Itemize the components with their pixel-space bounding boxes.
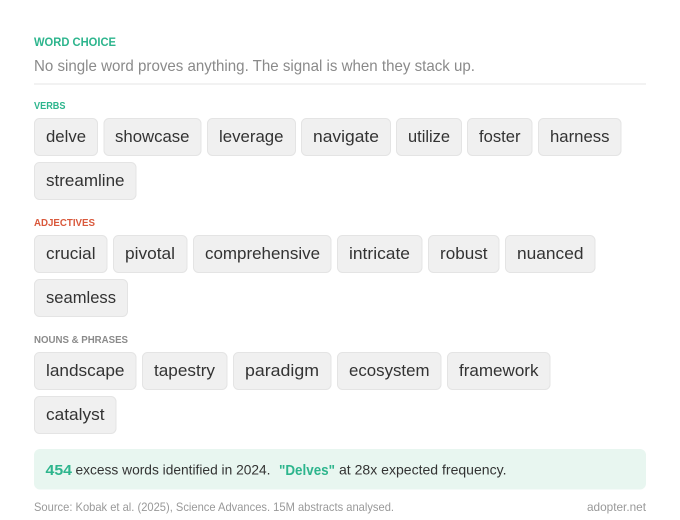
section: adjectives xyxy=(34,217,595,316)
source note: Source: Kobak et al. (2025), Science Advances. 15M abstracts analysed. xyxy=(34,500,394,514)
chip: paradigm xyxy=(234,352,331,390)
chip: showcase xyxy=(104,118,201,156)
chip: foster: foster xyxy=(479,127,521,146)
chip: nuanced xyxy=(506,236,595,272)
chip: harness xyxy=(538,118,621,156)
chip: foster xyxy=(468,118,532,156)
callout highlight: Delves: "Delves" xyxy=(279,462,335,479)
chip: comprehensive: comprehensive xyxy=(205,244,320,263)
chip: navigate: navigate xyxy=(313,127,379,146)
callout text: frequency: at 28x expected frequency. xyxy=(339,462,506,478)
subtitle: No single word proves anything. The signal is when they stack up. xyxy=(34,58,475,75)
chip: landscape xyxy=(34,352,136,390)
callout xyxy=(34,449,646,490)
chip: landscape: landscape xyxy=(46,361,124,380)
chip: leverage xyxy=(208,118,296,156)
chip: delve: delve xyxy=(46,127,86,146)
chip: leverage: leverage xyxy=(219,127,284,146)
section: nouns and phrases xyxy=(34,334,550,434)
chip: comprehensive xyxy=(194,236,331,272)
chip: streamline: streamline xyxy=(46,171,124,190)
chip: streamline xyxy=(34,162,136,200)
chip: delve xyxy=(34,118,98,156)
chip: seamless: seamless xyxy=(46,288,116,307)
chip: crucial xyxy=(34,236,107,272)
chip: harness: harness xyxy=(550,127,610,146)
chip: framework: framework xyxy=(459,361,539,380)
chip: tapestry xyxy=(142,352,227,390)
chip: crucial: crucial xyxy=(46,244,96,263)
callout text: excess words: excess words identified in 2024. xyxy=(76,462,270,478)
chip: utilize: utilize xyxy=(408,127,450,146)
chip: seamless xyxy=(34,280,128,316)
chip: intricate: intricate xyxy=(349,244,410,263)
chip: tapestry: tapestry xyxy=(154,361,215,380)
chip: utilize xyxy=(396,118,462,156)
verbs label: VERBS xyxy=(34,100,66,112)
chip: showcase: showcase xyxy=(115,127,190,146)
chip: robust xyxy=(428,236,499,272)
chip: nuanced: nuanced xyxy=(517,244,584,263)
chip: framework xyxy=(448,352,550,390)
site credit: adopter.net xyxy=(587,500,647,514)
chip: pivotal xyxy=(114,236,187,272)
chip: catalyst xyxy=(34,396,116,434)
eyebrow heading: WORD CHOICE xyxy=(34,37,116,49)
chip: intricate xyxy=(338,236,422,272)
chip: ecosystem: ecosystem xyxy=(349,361,430,380)
chip: robust: robust xyxy=(440,244,488,263)
chip: navigate xyxy=(302,118,390,156)
chip: ecosystem xyxy=(338,352,441,390)
nouns label: NOUNS & PHRASES xyxy=(34,334,128,346)
chip: catalyst: catalyst xyxy=(46,405,105,424)
adjectives label: ADJECTIVES xyxy=(34,217,95,229)
chip: paradigm: paradigm xyxy=(245,361,319,380)
chip: pivotal: pivotal xyxy=(125,244,175,263)
callout stat: 454: 454 xyxy=(46,462,73,479)
section: verbs xyxy=(34,100,621,200)
